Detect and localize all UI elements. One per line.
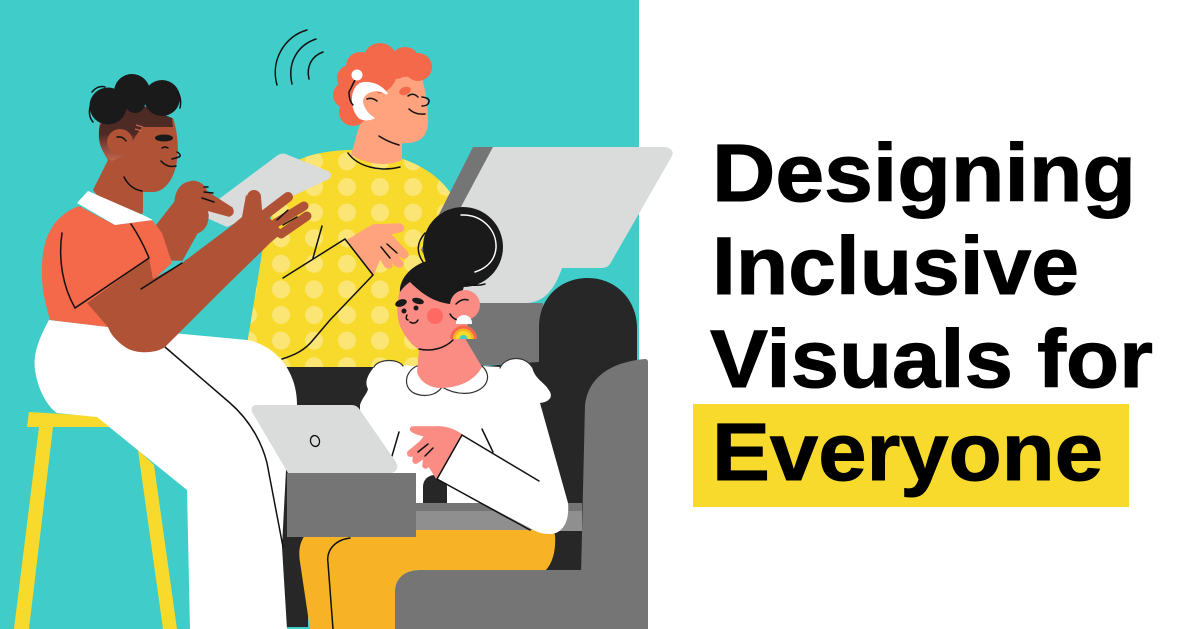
tablet [207,154,331,227]
hair strands [89,87,181,122]
highlight box [693,404,1129,507]
shaved hair [99,100,173,161]
monitor screen [420,147,673,303]
yellow trousers [299,530,555,629]
laptop lid [252,405,397,473]
chair back [539,278,637,570]
teal background panel [0,0,639,629]
pointing arm [157,181,233,260]
hair fringe [400,255,470,304]
chair arm [423,475,447,503]
sleeve and arm lines [61,224,182,308]
yellow dotted shirt [247,150,452,367]
hair buns [90,74,180,124]
hearing aid [349,70,387,120]
white trousers [35,320,300,629]
white collar [77,191,153,225]
sound waves [275,30,323,85]
monitor stand [463,303,543,366]
logo [309,435,321,447]
stool [14,412,177,629]
laptop [252,405,416,537]
head and neck [351,72,428,164]
ear [357,90,383,116]
person: man with tablet [35,74,331,629]
hand and arm lines [282,224,408,359]
hair bun [423,207,503,287]
title: Visuals for [710,314,1153,405]
rainbow earring [450,316,477,339]
neck and face [397,270,482,388]
armchair [395,359,648,629]
face features [348,85,429,169]
curly hair [333,43,432,126]
sleeve cuff [437,435,568,528]
face features [394,297,468,350]
coral shirt [42,206,172,327]
title: Inclusive [712,221,1079,312]
sleeve lines [392,429,539,530]
trouser crease [165,347,283,547]
person: man with hearing aid [247,30,452,367]
main arm and hand [87,195,307,352]
round collar [406,366,488,396]
ear [107,129,133,155]
laptop base [287,473,416,537]
title: Designing [712,128,1136,219]
title [710,128,1153,498]
dark chair base [282,361,583,627]
title: Everyone [712,407,1103,498]
neck and head [93,118,178,225]
bun highlight and stray strands [418,215,496,285]
ruffle outlines [374,358,532,368]
seat bar [416,503,582,531]
white ruffled blouse [360,358,568,534]
woman [360,207,568,534]
hand [408,427,462,479]
ear [450,290,480,320]
face features [117,125,180,191]
